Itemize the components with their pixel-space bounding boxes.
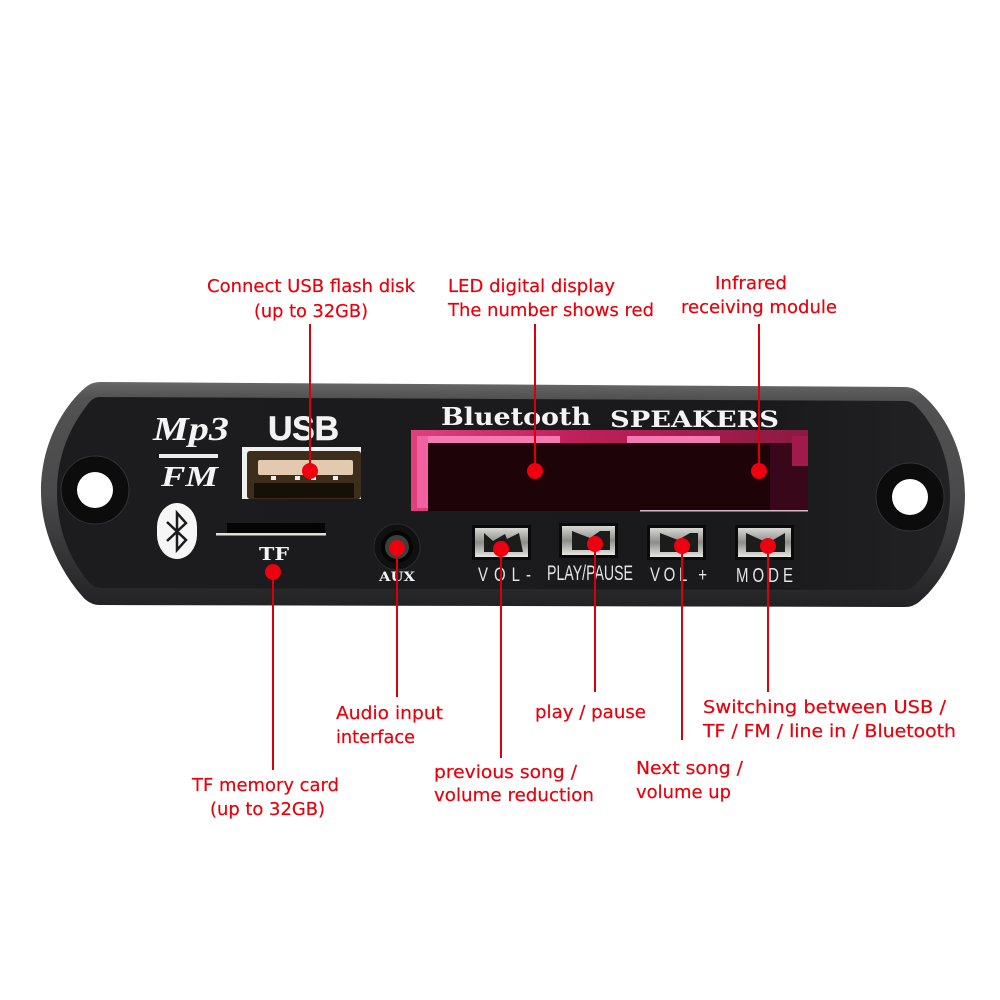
logo: Mp3 FM (152, 411, 229, 493)
label: TF memory card: TF memory card (191, 776, 339, 796)
label: TF memory card (191, 776, 339, 820)
heading: Bluetooth SPEAKERS: SPEAKERS (610, 407, 779, 433)
label: previous song (434, 763, 594, 806)
label: USB flash disk: Connect USB flash disk (207, 277, 416, 297)
button: MODE (735, 525, 794, 560)
button labels: VOL + (650, 563, 707, 585)
label: previous song: volume reduction (434, 786, 594, 806)
button labels: PLAY/PAUSE (547, 562, 633, 585)
panel: module body (41, 382, 965, 607)
label: Audio input (336, 704, 443, 748)
label: LED display: LED digital display (448, 277, 615, 297)
label: TF memory card: (up to 32GB) (210, 800, 325, 820)
callout: VOL+ line (674, 538, 690, 740)
buttons (472, 523, 794, 560)
callout: display line (527, 324, 543, 479)
label: next song: Next song / (636, 759, 743, 779)
TF card slot (216, 523, 326, 536)
button: PLAY/PAUSE (559, 523, 618, 558)
label: LED display: The number shows red (447, 301, 654, 321)
USB port (242, 447, 361, 499)
label: Infrared: receiving module (681, 298, 837, 318)
callout: AUX line (389, 540, 405, 697)
mounting hole left (61, 456, 129, 524)
label: Audio input: interface (336, 728, 415, 748)
mounting hole right (876, 463, 944, 531)
label: Switching: Switching between USB / (703, 698, 946, 718)
heading: Bluetooth SPEAKERS: Bluetooth (441, 402, 591, 431)
label: Infrared (681, 274, 837, 318)
label: AUX: AUX (378, 570, 416, 585)
callout: MODE line (760, 538, 776, 692)
button labels: MODE (736, 564, 793, 587)
label: Audio input: Audio input (336, 704, 443, 724)
callout: TF line (265, 564, 281, 770)
LED display (411, 430, 808, 512)
label: next song: volume up (636, 783, 731, 803)
heading: Bluetooth SPEAKERS (441, 402, 779, 433)
label: TF: TF (259, 544, 289, 565)
AUX jack (374, 524, 420, 570)
button labels (478, 562, 793, 587)
button: VOL- (472, 525, 531, 560)
logo: Mp3 FM: FM (160, 461, 220, 493)
label: next song (636, 759, 743, 803)
icon: Bluetooth badge (157, 503, 197, 559)
callout: USB line (302, 324, 318, 479)
label: USB flash disk: (up to 32GB) (254, 302, 368, 322)
label: LED display (447, 277, 654, 321)
heading: USB: USB (268, 410, 339, 448)
label: Infrared: Infrared (715, 274, 787, 294)
label: Switching (702, 698, 956, 742)
label: USB flash disk (207, 277, 416, 322)
callout: play line (587, 536, 603, 692)
label: play / pause: play / pause (535, 703, 646, 723)
callout: VOL- line (493, 541, 509, 758)
logo: Mp3 FM: Mp3 (152, 411, 229, 448)
label: previous song: previous song / (434, 763, 577, 783)
label: Switching: TF / FM / line in / Bluetooth (702, 722, 956, 742)
button: VOL+ (647, 525, 706, 560)
button labels: VOL- (478, 563, 531, 585)
callout: infrared line (751, 324, 767, 479)
